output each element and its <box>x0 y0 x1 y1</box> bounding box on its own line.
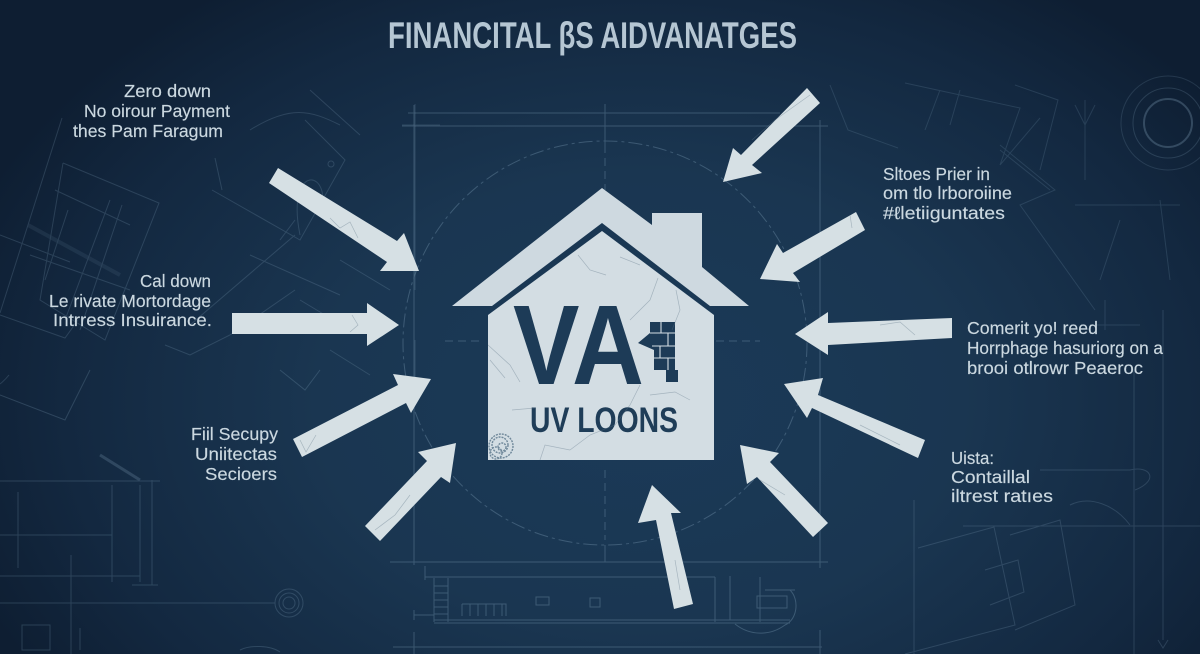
label: security: Uniitectas <box>195 444 277 464</box>
label: security <box>191 424 278 484</box>
label: middle right: Horrphage hasuriorg on a <box>967 338 1163 358</box>
label: middle right: brooi otlrowr Peaeroc <box>967 358 1143 378</box>
label: security: Secioers <box>205 464 277 484</box>
arrow: bottom right <box>740 445 828 537</box>
arrow: middle right <box>795 312 952 355</box>
blueprint: central frame and dashed circle <box>390 104 828 654</box>
arrows pointing to house <box>232 88 952 609</box>
house roof <box>452 188 749 306</box>
blueprint: concentric circles <box>1121 76 1200 170</box>
label: upper right: #ℓletiiguntates <box>883 203 1005 223</box>
label: interest rates: iltrest ratıes <box>951 486 1053 506</box>
label: zero down: No oirour Payment <box>84 101 230 121</box>
arrow cracks <box>300 95 915 590</box>
house cracks and wear <box>488 255 690 460</box>
label: security: Fiil Secupy <box>191 424 278 444</box>
blueprint: upper left drawing <box>0 90 440 384</box>
label: zero down: thes Pam Faragum <box>73 121 223 141</box>
label: private mortgage insurance: Intrress Insuirance. <box>53 310 212 330</box>
loans lettering: UV LOONS <box>530 401 678 440</box>
label: private mortgage insurance <box>49 271 212 330</box>
label: interest rates <box>951 448 1053 506</box>
arrow: lower left <box>293 374 431 457</box>
label: upper right <box>883 164 1012 223</box>
label: middle right: Comerit yo! reed <box>967 318 1098 338</box>
VA lettering: VA <box>513 282 644 408</box>
label: interest rates: Contaillal <box>951 467 1030 487</box>
blueprint: bottom machine drawing <box>414 566 796 633</box>
label: private mortgage insurance: Le rivate Mortordage <box>49 291 211 311</box>
arrow: upper right <box>760 212 865 282</box>
blueprint: upper right drawing <box>830 83 1180 330</box>
label: middle right <box>967 318 1163 378</box>
label: zero down <box>73 81 230 141</box>
arrow: top right <box>723 88 820 182</box>
arrow: upper left <box>269 168 419 271</box>
arrow: middle left <box>232 303 399 346</box>
house icon <box>452 188 749 460</box>
blueprint: lower left drawing <box>0 370 320 654</box>
icon: bricks <box>638 322 678 382</box>
title: FINANCITAL βS AIDVANATGES <box>388 15 797 56</box>
blueprint: lower right drawing <box>905 310 1200 654</box>
label: private mortgage insurance: Cal down <box>140 271 211 291</box>
label: upper right: om tlo lrboroiine <box>883 183 1012 203</box>
label: interest rates: Uista: <box>951 448 994 468</box>
arrow: lower right <box>784 378 925 458</box>
worn patch <box>489 434 513 459</box>
label: upper right: Sltoes Prier in <box>883 164 990 184</box>
arrow: bottom <box>638 485 693 609</box>
arrow: bottom left <box>365 443 456 541</box>
label: zero down: Zero down <box>124 81 211 101</box>
house body <box>488 231 714 460</box>
